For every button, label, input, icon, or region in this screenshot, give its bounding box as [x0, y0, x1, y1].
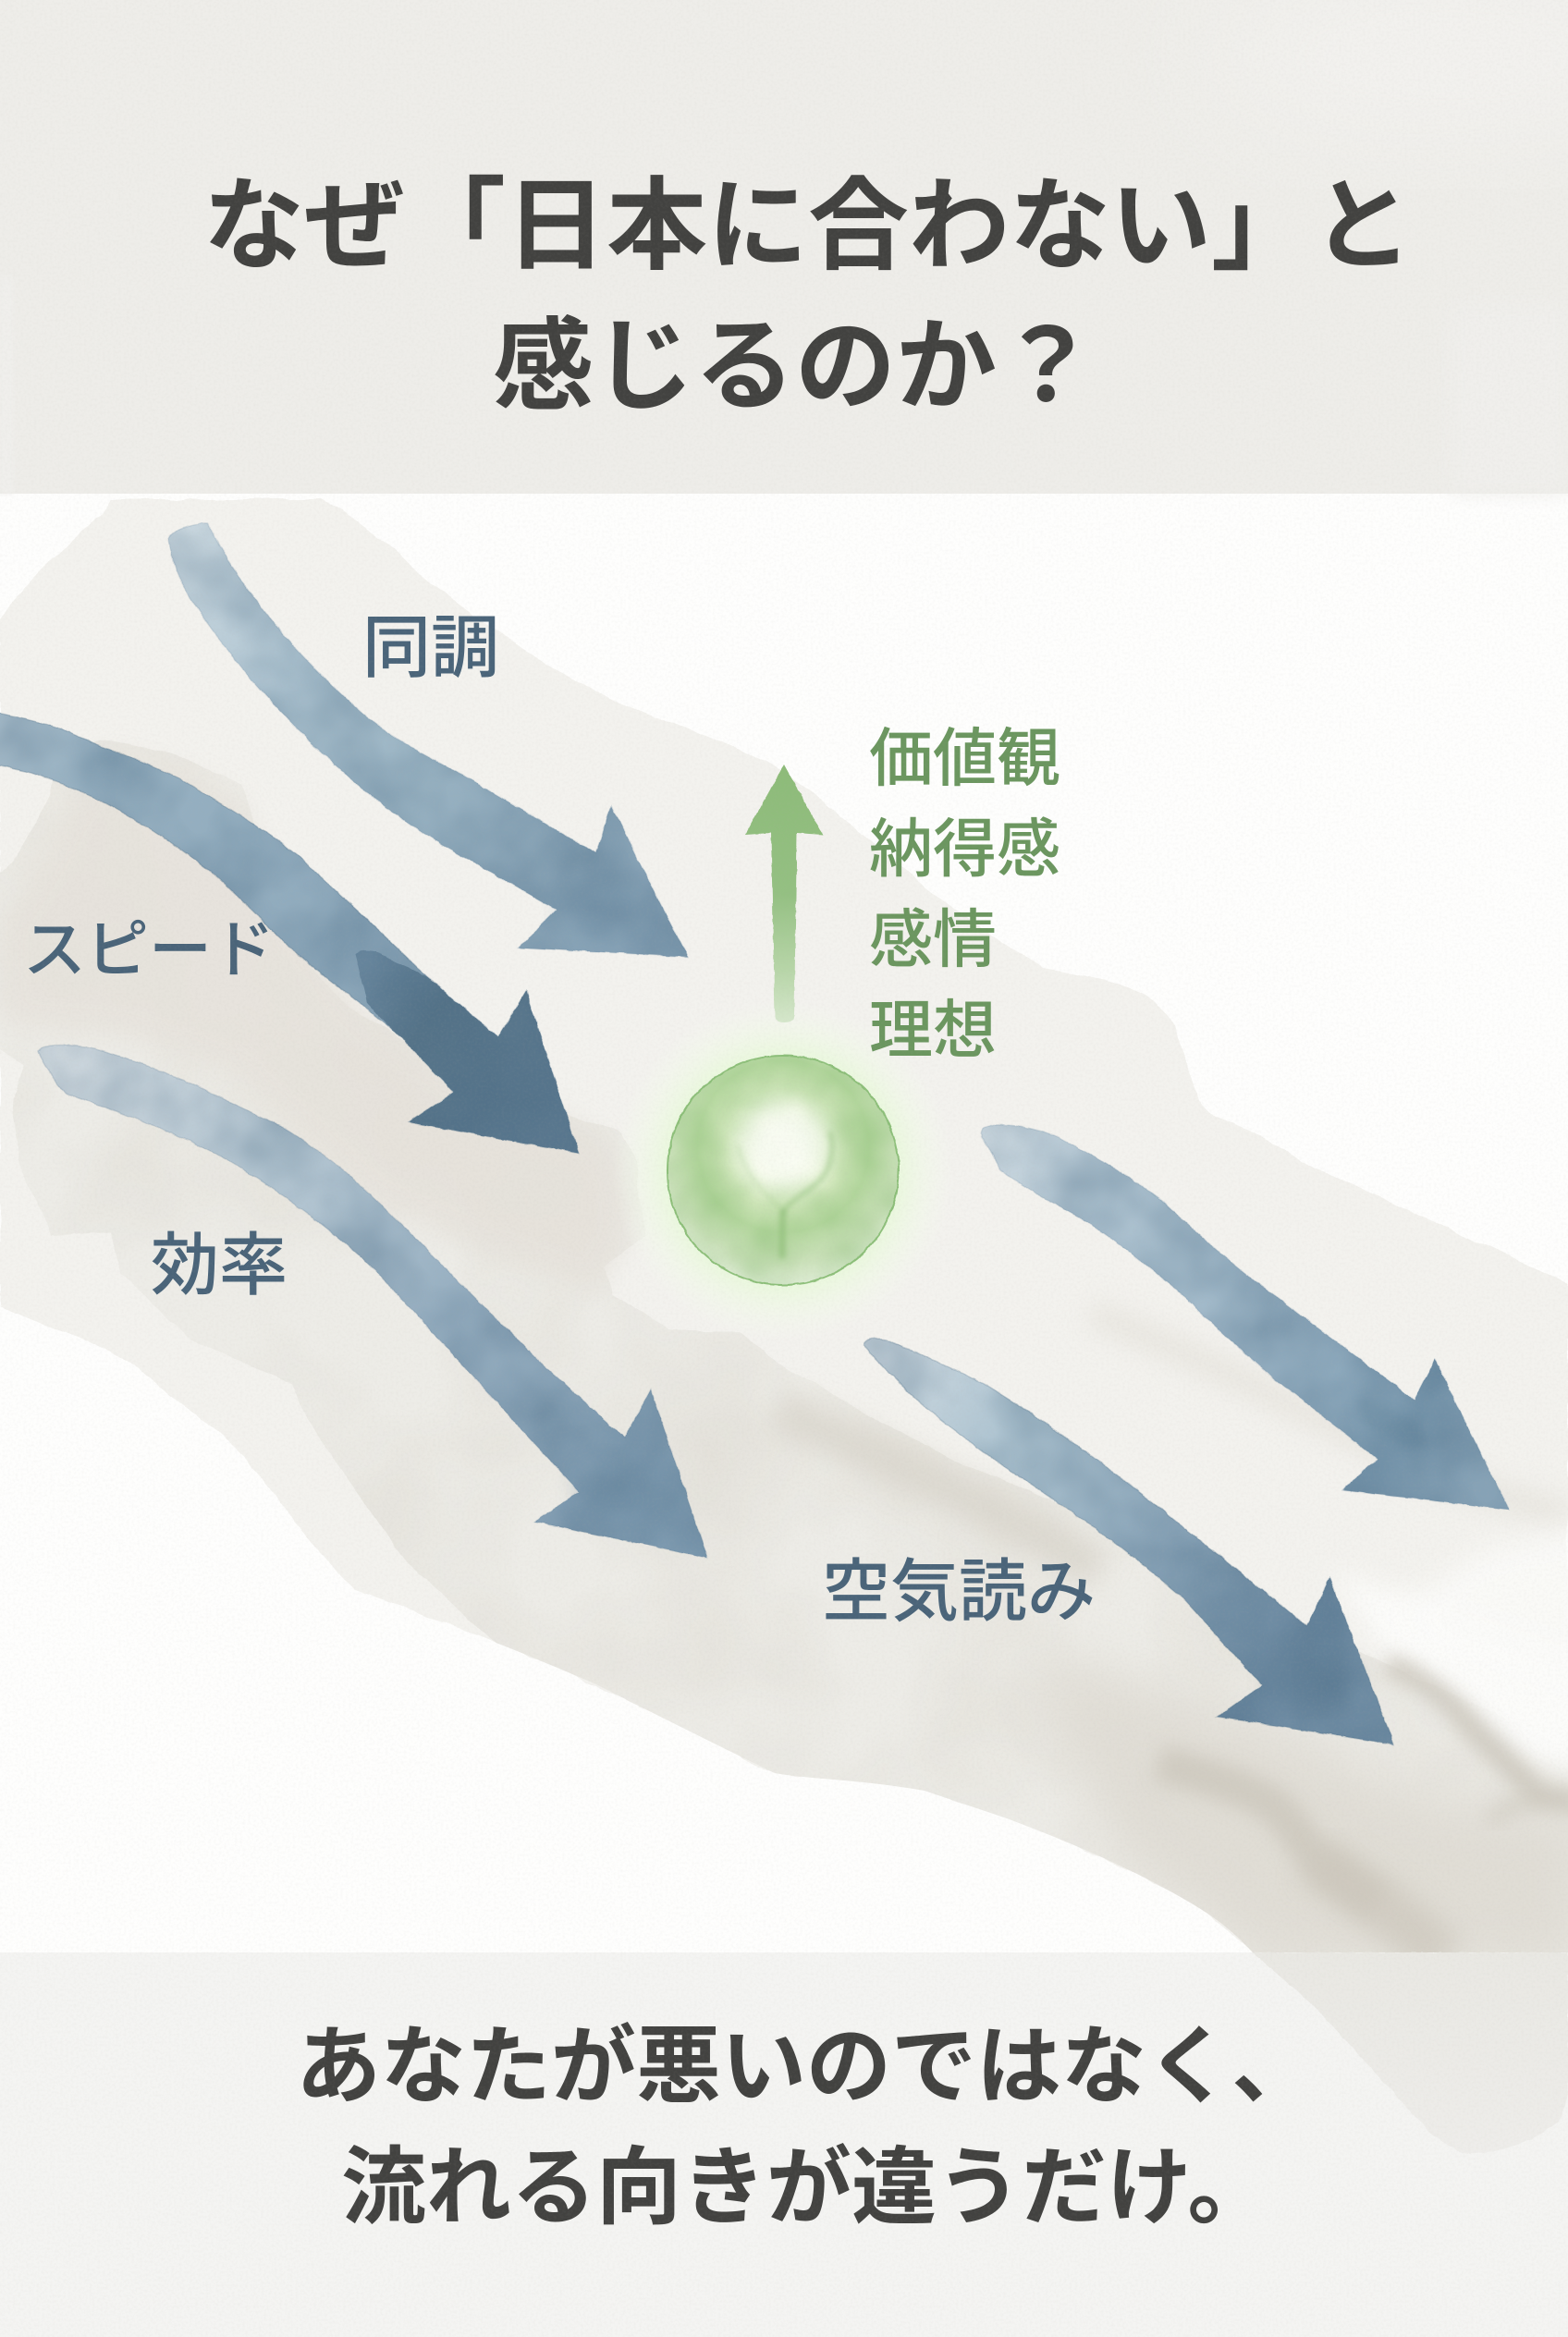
- inner beige layer: [0, 740, 1568, 1978]
- panel: header band: [0, 0, 1568, 494]
- arrow: upward green: [745, 765, 823, 1022]
- label: 価値観: 価値観: [869, 723, 1060, 794]
- watercolor wash band: [0, 499, 1568, 1978]
- label: 納得感: 納得感: [869, 814, 1060, 885]
- orb disc: [668, 1056, 899, 1285]
- arrow: スピード: [0, 712, 579, 1153]
- label: 空気読み: 空気読み: [822, 1553, 1096, 1630]
- arrow: 同調: [168, 523, 688, 957]
- label: 同調: 同調: [362, 609, 499, 686]
- white gap: [1361, 1592, 1568, 1779]
- arrow: right lower: [864, 1339, 1394, 1744]
- label: 感情: 感情: [869, 904, 997, 975]
- seedling orb: [612, 999, 954, 1341]
- label: 理想: 理想: [869, 995, 997, 1066]
- conclusion text: 流れる向きが違うだけ。: [341, 2141, 1272, 2235]
- conclusion text: [296, 2020, 1317, 2235]
- green value labels: [869, 723, 1060, 1066]
- conclusion text: あなたが悪いのではなく、: [296, 2020, 1317, 2114]
- title: 感じるのか？: [493, 311, 1097, 423]
- panel: footer band: [0, 1952, 1568, 2337]
- beige streaks: [777, 1410, 1100, 1572]
- icon: sprout leaf: [738, 1133, 832, 1255]
- label: スピード: スピード: [23, 915, 275, 985]
- wash bleeding into footer: [1253, 1952, 1568, 2154]
- arrow: right upper: [982, 1124, 1509, 1510]
- arrow: 効率: [38, 1045, 707, 1558]
- orb glow: [612, 999, 954, 1341]
- label: 効率: 効率: [151, 1227, 288, 1303]
- beige shadow patch: [13, 819, 615, 1272]
- title: なぜ「日本に合わない」と: [203, 170, 1413, 283]
- title: [203, 170, 1413, 423]
- icon: sprout highlight: [739, 1104, 827, 1189]
